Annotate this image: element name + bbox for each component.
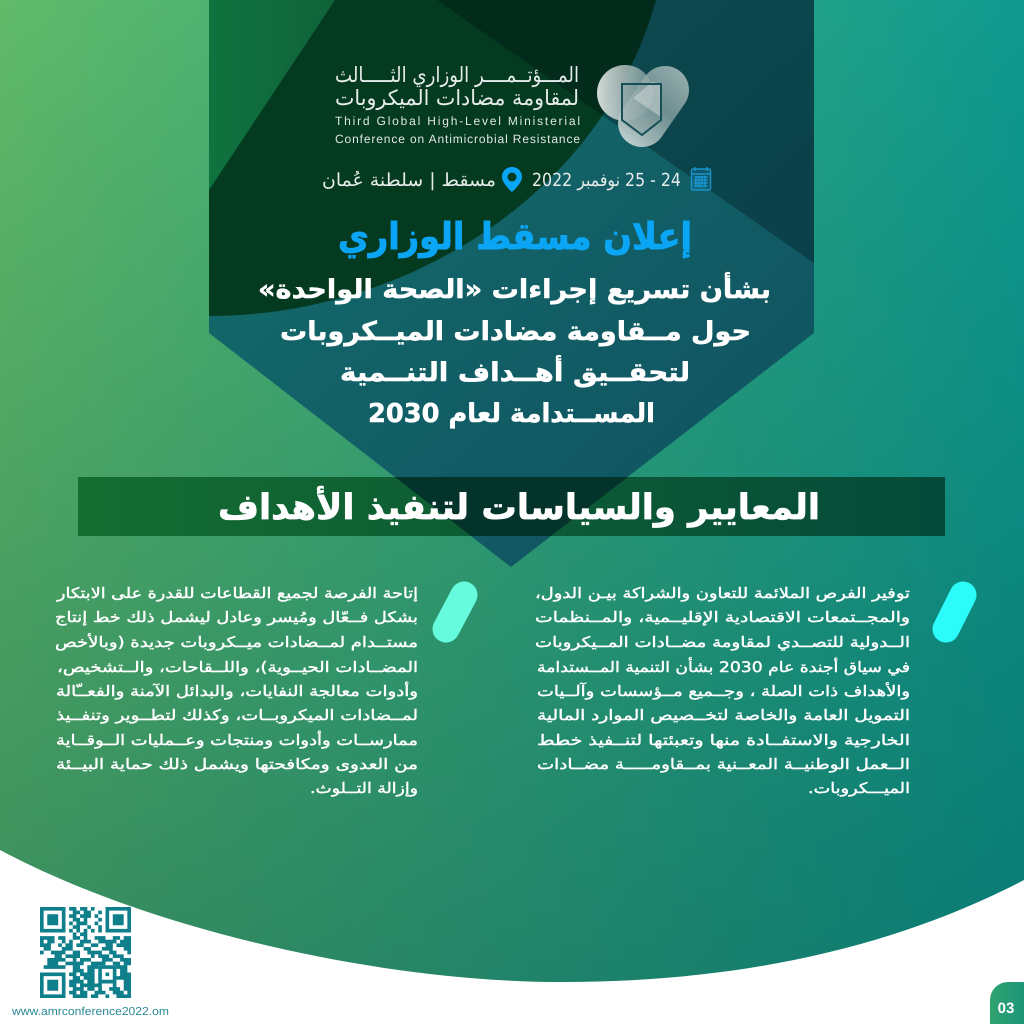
- date and place line: [322, 167, 710, 192]
- banner: section heading: [78, 477, 945, 536]
- subtitle lines: بشأن تسريع إجراءات «الصحة الواحدة»: [258, 272, 771, 305]
- panel: left column text: ممارســات وأدوات ومنتجات وعــمليات الــوقــاية: [56, 730, 418, 749]
- panel: right column text: الخارجية والاستفــادة منها وتعبئتها لتنــفيذ خطط: [537, 733, 910, 749]
- icon: location pin: [502, 167, 522, 192]
- panel: right column text: الميـــكروبات.: [808, 781, 910, 797]
- panel: left column text: وأدوات معالجة النفايات، والبدائل الآمنة والفعــّالة: [56, 681, 418, 700]
- panel: left column text: إتاحة الفرصة لجميع القطاعات للقدرة على الابتكار: [56, 586, 418, 602]
- panel: right column text: التمويل العامة والخاصة لتخــصيص الموارد المالية: [537, 708, 910, 724]
- page number tab: 03: [998, 1000, 1014, 1017]
- panel: right column text: الــدولية للتصــدي لمقاومة مضــادات المــيكروبات: [535, 635, 910, 651]
- panel: left column text: [55, 586, 464, 797]
- conference title: المـــؤتــمــــر الوزاري الثـــــالث: [335, 63, 579, 88]
- page number tab: [990, 982, 1024, 1024]
- panel: right column text: الــعمل الوطنيــة المعــنية بمــقاومـــــة مضــادات: [537, 757, 910, 773]
- conference title: Third Global High-Level Ministerial: [335, 114, 580, 128]
- panel: left column text: من العدوى ومكافحتها ويشمل ذلك حماية البيــئة: [56, 757, 418, 773]
- subtitle lines: [258, 272, 771, 429]
- panel: left column text: لمــضادات الميكروبــات، وكذلك لتطــوير وتنفــيذ: [56, 708, 418, 724]
- panel: right column text: في سياق أجندة عام 2030 بشأن التنمية المــستدامة: [537, 657, 910, 676]
- conference title: لمقاومة مضادات الميكروبات: [335, 86, 579, 111]
- panel: left column text: وإزالة التــلوث.: [310, 781, 418, 797]
- panel: central hexagon: [209, 0, 814, 567]
- conference title: Conference on Antimicrobial Resistance: [335, 132, 580, 146]
- QR code: [40, 907, 131, 998]
- panel: left column text: مستــدام لمــضادات ميــكروبات جديدة (وبالأخص: [55, 633, 418, 651]
- subtitle lines: حول مــقاومة مضادات الميــكروبات: [280, 317, 751, 347]
- icon: right cyan pill: [946, 595, 963, 629]
- date and place line: 24 - 25 نوفمبر 2022: [532, 170, 681, 191]
- panel: right column text: توفير الفرص الملائمة للتعاون والشراكة بيـن الدول،: [535, 586, 910, 602]
- icon: calendar: [692, 167, 710, 190]
- heading: declaration name: إعلان مسقط الوزاري: [338, 215, 692, 259]
- panel: right column text: والأهداف ذات الصلة ، وجــميع مــؤسسات وآلــيات: [537, 682, 910, 700]
- conference title: [335, 63, 580, 146]
- subtitle lines: المســتدامة لعام 2030: [368, 399, 655, 429]
- icon: conference logo: [597, 65, 665, 135]
- panel: left column text: بشكل فــعّال ومُيسر وعادل ليشمل ذلك خط إنتاج: [55, 610, 418, 626]
- website address: www.amrconference2022.om: [11, 1006, 169, 1018]
- banner: section heading: المعايير والسياسات لتنفيذ الأهداف: [218, 485, 820, 528]
- subtitle lines: لتحقــيق أهــداف التنــمية: [340, 355, 690, 388]
- icon: left mint pill: [446, 595, 464, 629]
- date and place line: مسقط | سلطنة عُمان: [322, 170, 496, 191]
- white curved footer: [0, 850, 1024, 1024]
- panel: left column text: المضــادات الحيــوية)، واللــقاحات، والــتشخيص،: [57, 660, 418, 676]
- panel: right column text: والمجــتمعات الاقتصادية الإقليــمية، والمــنظمات: [535, 610, 910, 626]
- panel: right column text: [535, 586, 963, 797]
